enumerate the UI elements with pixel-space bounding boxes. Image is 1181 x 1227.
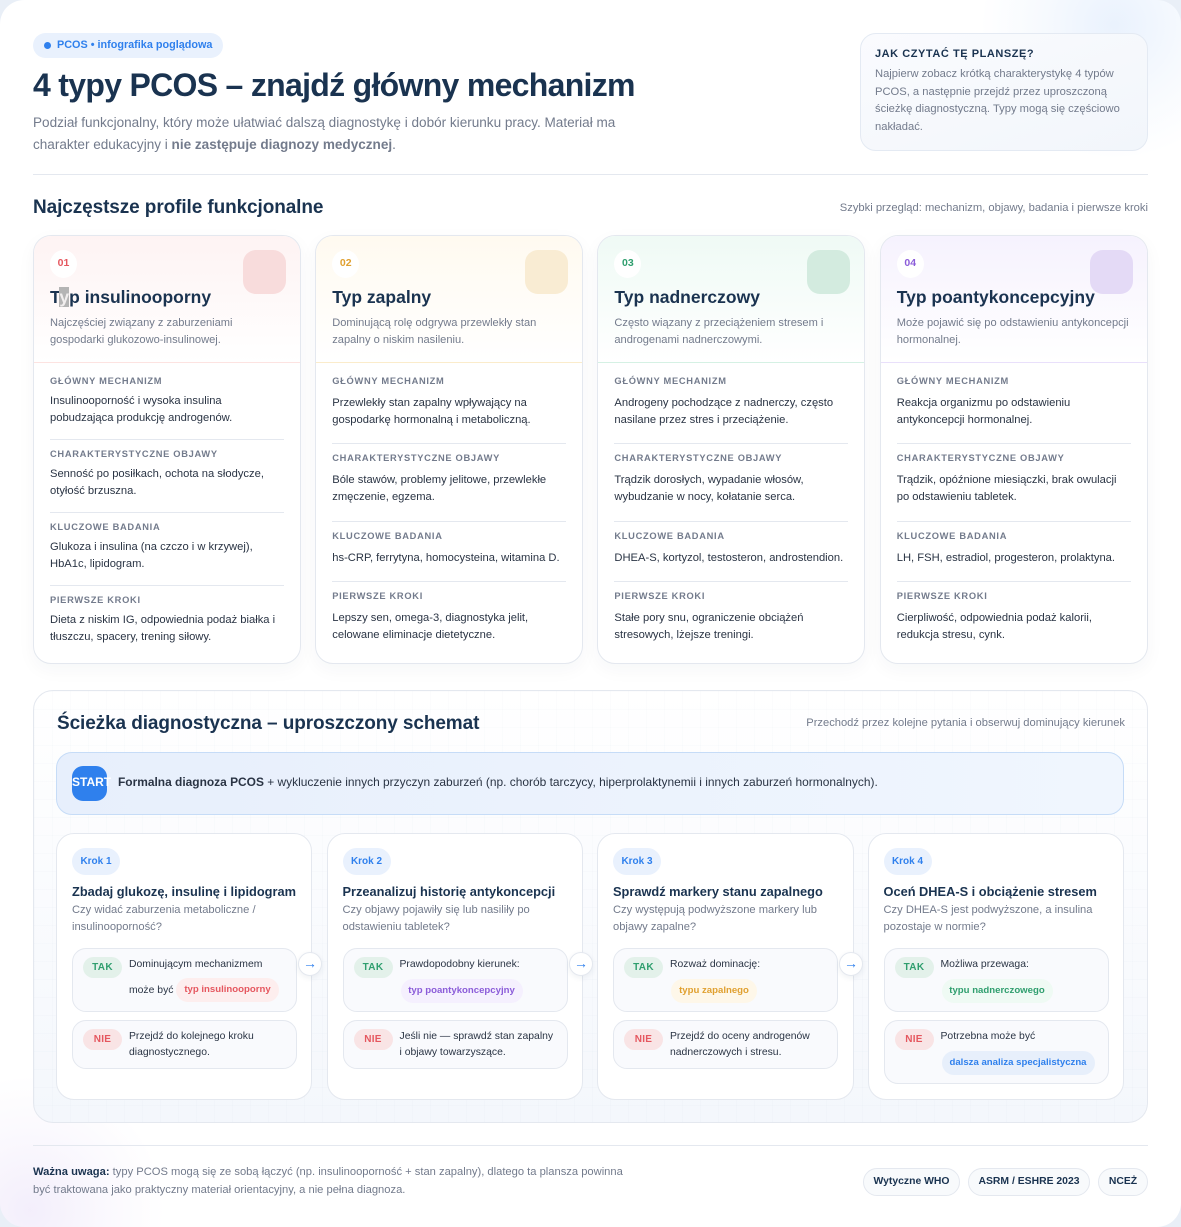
card description bbox=[332, 317, 536, 346]
step 3 bbox=[597, 833, 854, 1100]
step label: Krok 3 bbox=[621, 856, 653, 867]
panel: type 4: Cierpliwość, odpowiednia podaż kalorii, bbox=[897, 612, 1092, 624]
panel: type 2: Bóle stawów, problemy jelitowe, przewlekłe bbox=[332, 474, 546, 486]
how to read text: nakładać. bbox=[875, 121, 923, 133]
card description bbox=[50, 317, 232, 346]
how to read text: Najpierw zobacz krótką charakterystykę 4 typów bbox=[875, 68, 1114, 80]
step label bbox=[72, 848, 120, 875]
step question: Czy objawy pojawiły się lub nasiliły po bbox=[342, 904, 530, 916]
panel: type 3: nasilane przez stres i przeciążenie. bbox=[614, 414, 789, 426]
yes branch bbox=[884, 948, 1108, 1012]
number 01 bbox=[50, 250, 77, 278]
step question: Czy występują podwyższone markery lub bbox=[613, 904, 817, 916]
yes branch: typu nadnerczowego bbox=[949, 985, 1045, 996]
symptoms: CHARAKTERYSTYCZNE OBJAWY bbox=[332, 453, 500, 463]
tests: KLUCZOWE BADANIA bbox=[50, 522, 160, 532]
footer note bbox=[33, 1166, 623, 1196]
panel: type 3: DHEA-S, kortyzol, testosteron, androstendion. bbox=[614, 552, 843, 564]
symptoms: CHARAKTERYSTYCZNE OBJAWY bbox=[50, 449, 218, 459]
source: WHO bbox=[863, 1168, 960, 1196]
panel: type 4: antykoncepcji hormonalnej. bbox=[897, 414, 1032, 426]
no branch bbox=[613, 1020, 838, 1069]
step 1 bbox=[56, 833, 312, 1100]
panel: type 4: po odstawieniu tabletek. bbox=[897, 491, 1017, 503]
tests: KLUCZOWE BADANIA bbox=[332, 531, 443, 541]
number 02: 02 bbox=[340, 257, 352, 269]
yes branch: typ poantykoncepcyjny bbox=[408, 985, 515, 996]
how to read text: ścieżkę diagnostyczną. Typy mogą się częściowo bbox=[875, 103, 1120, 115]
yes branch: typ insulinooporny bbox=[184, 984, 271, 995]
step question: objawy zapalne? bbox=[613, 921, 696, 933]
panel: type 1: HbA1c, lipidogram. bbox=[50, 558, 145, 570]
panel: type 3: Trądzik dorosłych, wypadanie włosów, bbox=[614, 474, 804, 486]
yes branch: TAK bbox=[363, 962, 383, 973]
panel: type 2: gospodarkę hormonalną i metaboliczną. bbox=[332, 414, 531, 426]
first steps: PIERWSZE KROKI bbox=[50, 595, 141, 605]
start icon bbox=[72, 766, 107, 801]
panel: type 1 bbox=[33, 235, 301, 664]
step question: pozostaje w normie? bbox=[884, 921, 986, 933]
arrow: → bbox=[303, 955, 317, 971]
step title: Sprawdź markery stanu zapalnego bbox=[613, 884, 823, 899]
no branch: NIE bbox=[905, 1034, 923, 1045]
no branch bbox=[884, 1020, 1108, 1084]
arrow: → bbox=[574, 955, 588, 971]
no branch: Potrzebna może być bbox=[940, 1031, 1035, 1042]
no branch: dalsza analiza specjalistyczna bbox=[949, 1057, 1087, 1068]
no branch: Przejdź do oceny androgenów bbox=[670, 1031, 810, 1042]
card description: Może pojawić się po odstawieniu antykoncepcji bbox=[897, 317, 1129, 329]
panel: type 1: otyłość brzuszna. bbox=[50, 485, 136, 497]
how to read text: PCOS, a następnie przejdź przez uproszczoną bbox=[875, 86, 1107, 98]
card description: androgenami nadnerczowymi. bbox=[614, 334, 762, 346]
panel: how to read bbox=[860, 33, 1148, 151]
yes branch: Możliwa przewaga: bbox=[940, 959, 1029, 970]
panel: type 1: Dieta z niskim IG, odpowiednia podaż białka i bbox=[50, 614, 275, 626]
symptoms: CHARAKTERYSTYCZNE OBJAWY bbox=[614, 453, 782, 463]
yes branch: TAK bbox=[633, 962, 654, 973]
icon placeholder bbox=[525, 250, 568, 294]
panel: type 4: LH, FSH, estradiol, progesteron, prolaktyna. bbox=[897, 552, 1115, 564]
step label bbox=[613, 848, 661, 875]
step title: Przeanalizuj historię antykoncepcji bbox=[342, 884, 555, 899]
no branch: i objawy towarzyszące. bbox=[400, 1047, 506, 1058]
source: NCEZ: NCEŻ bbox=[1109, 1176, 1137, 1187]
start banner bbox=[56, 752, 1124, 815]
yes branch: Rozważ dominację: bbox=[670, 959, 760, 970]
no branch bbox=[342, 1020, 568, 1069]
no branch: NIE bbox=[364, 1034, 382, 1045]
source: WHO: Wytyczne WHO bbox=[873, 1176, 950, 1187]
arrow bbox=[839, 952, 863, 976]
yes branch: TAK bbox=[92, 962, 113, 973]
panel: type 2: Przewlekły stan zapalny wpływający na bbox=[332, 397, 527, 409]
icon placeholder bbox=[807, 250, 850, 294]
panel: type 1: Senność po posiłkach, ochota na słodycze, bbox=[50, 468, 264, 480]
path heading: Ścieżka diagnostyczna – uproszczony schemat bbox=[57, 713, 479, 734]
step question bbox=[72, 904, 256, 933]
no branch: Jeśli nie — sprawdź stan zapalny bbox=[400, 1031, 553, 1042]
panel: type 1: Insulinooporność i wysoka insulina bbox=[50, 395, 222, 407]
card description: zapalny o niskim nasileniu. bbox=[332, 334, 464, 346]
footer note: Ważna uwaga: typy PCOS mogą się ze sobą łączyć (np. insulinooporność + stan zapalny), dlatego ta plansza powinna bbox=[33, 1166, 623, 1178]
panel: type 2: hs-CRP, ferrytyna, homocysteina, witamina D. bbox=[332, 552, 560, 564]
step question bbox=[613, 904, 817, 933]
yes branch: TAK bbox=[904, 962, 924, 973]
step question bbox=[884, 904, 1092, 933]
step label bbox=[884, 848, 932, 875]
panel: type 2: celowane eliminacje dietetyczne. bbox=[332, 629, 495, 641]
panel: type 4: redukcja stresu, cynk. bbox=[897, 629, 1005, 641]
icon placeholder bbox=[243, 250, 286, 294]
number 03 bbox=[614, 250, 641, 278]
panel: type 4 bbox=[880, 235, 1148, 664]
step label bbox=[342, 848, 390, 875]
no branch bbox=[72, 1020, 297, 1069]
section note: Szybki przegląd: mechanizm, objawy, badania i pierwsze kroki bbox=[840, 202, 1148, 214]
number 04 bbox=[897, 250, 924, 278]
no branch: Przejdź do kolejnego kroku bbox=[129, 1031, 254, 1042]
panel: type 4: Reakcja organizmu po odstawieniu bbox=[897, 397, 1070, 409]
first steps: PIERWSZE KROKI bbox=[614, 591, 705, 601]
step title: Zbadaj glukozę, insulinę i lipidogram bbox=[72, 884, 296, 899]
title: 4 typy PCOS – znajdź główny mechanizm bbox=[33, 67, 635, 103]
no branch: nadnerczowych i stresu. bbox=[670, 1047, 781, 1058]
panel: diagnostic path bbox=[33, 690, 1148, 1123]
first steps: PIERWSZE KROKI bbox=[332, 591, 423, 601]
yes branch: może być bbox=[129, 985, 173, 996]
tests: KLUCZOWE BADANIA bbox=[614, 531, 725, 541]
card description: Często wiązany z przeciążeniem stresem i bbox=[614, 317, 823, 329]
panel: type 3: wybudzanie w nocy, kołatanie serca. bbox=[614, 491, 795, 503]
step question: odstawieniu tabletek? bbox=[342, 921, 450, 933]
panel: type 2 bbox=[315, 235, 583, 664]
number 04: 04 bbox=[904, 257, 916, 269]
source: ASRM bbox=[968, 1168, 1090, 1196]
number 02 bbox=[332, 250, 359, 278]
mechanism: GŁÓWNY MECHANIZM bbox=[332, 376, 445, 386]
panel: type 1: tłuszczu, spacery, trening siłowy. bbox=[50, 631, 211, 643]
badge: PCOS • infografika poglądowa bbox=[57, 39, 212, 51]
card description: Najczęściej związany z zaburzeniami bbox=[50, 317, 232, 329]
step label: Krok 1 bbox=[80, 856, 112, 867]
start icon: START bbox=[72, 775, 111, 789]
arrow bbox=[569, 952, 593, 976]
mechanism: GŁÓWNY MECHANIZM bbox=[614, 376, 727, 386]
step question: insulinooporność? bbox=[72, 921, 162, 933]
intro text: Podział funkcjonalny, który może ułatwiać dalszą diagnostykę i dobór kierunku pracy. Materiał ma bbox=[33, 115, 615, 130]
source: NCEZ bbox=[1098, 1168, 1148, 1196]
step question: Czy widać zaburzenia metaboliczne / bbox=[72, 904, 256, 916]
yes branch bbox=[72, 948, 297, 1012]
source: ASRM: ASRM / ESHRE 2023 bbox=[978, 1176, 1080, 1187]
number 03: 03 bbox=[622, 257, 634, 269]
card title: Typ insulinooporny bbox=[50, 287, 211, 307]
panel: type 3: stresowych, lżejsze treningi. bbox=[614, 629, 754, 641]
path note: Przechodź przez kolejne pytania i obserwuj dominujący kierunek bbox=[806, 717, 1125, 729]
intro text bbox=[33, 115, 616, 152]
step 2 bbox=[326, 833, 582, 1100]
how to read text bbox=[875, 68, 1120, 133]
card description bbox=[897, 317, 1129, 346]
panel: type 1: pobudzająca produkcję androgenów. bbox=[50, 412, 232, 424]
step question: Czy DHEA-S jest podwyższone, a insulina bbox=[884, 904, 1092, 916]
step question bbox=[342, 904, 530, 933]
number 01: 01 bbox=[58, 257, 69, 269]
yes branch: typu zapalnego bbox=[679, 985, 749, 996]
symptoms: CHARAKTERYSTYCZNE OBJAWY bbox=[897, 453, 1065, 463]
intro text: charakter edukacyjny i nie zastępuje diagnozy medycznej. bbox=[33, 137, 396, 152]
step title: Oceń DHEA-S i obciążenie stresem bbox=[884, 884, 1097, 899]
panel: type 3: Stałe pory snu, ograniczenie obciążeń bbox=[614, 612, 803, 624]
panel: type 4: Trądzik, opóźnione miesiączki, brak owulacji bbox=[897, 474, 1116, 486]
section heading: profiles: Najczęstsze profile funkcjonalne bbox=[33, 197, 323, 218]
yes branch: Dominującym mechanizmem bbox=[129, 959, 262, 970]
first steps: PIERWSZE KROKI bbox=[897, 591, 987, 601]
arrow: → bbox=[844, 955, 858, 971]
yes branch bbox=[613, 948, 838, 1012]
card description bbox=[614, 317, 823, 346]
icon placeholder bbox=[1090, 250, 1133, 294]
start text: Formalna diagnoza PCOS + wykluczenie innych przyczyn zaburzeń (np. chorób tarczycy, hiperprolaktynemii i innych zaburzeń hormonalnych). bbox=[118, 775, 878, 789]
footer note: być traktowana jako praktyczny materiał orientacyjny, a nie pełna diagnoza. bbox=[33, 1184, 405, 1196]
card title: Typ poantykoncepcyjny bbox=[897, 287, 1095, 307]
panel: type 3: Androgeny pochodzące z nadnerczy, często bbox=[614, 397, 833, 409]
no branch: NIE bbox=[94, 1034, 111, 1045]
no branch: NIE bbox=[635, 1034, 652, 1045]
card description: Dominującą rolę odgrywa przewlekły stan bbox=[332, 317, 536, 329]
no branch: diagnostycznego. bbox=[129, 1047, 210, 1058]
panel: type 3 bbox=[597, 235, 865, 664]
tests: KLUCZOWE BADANIA bbox=[897, 531, 1007, 541]
panel: type 1: Glukoza i insulina (na czczo i w krzywej), bbox=[50, 541, 253, 553]
arrow bbox=[298, 952, 322, 976]
card title: Typ zapalny bbox=[332, 287, 431, 307]
how to read heading: JAK CZYTAĆ TĘ PLANSZĘ? bbox=[875, 48, 1034, 60]
yes branch: Prawdopodobny kierunek: bbox=[400, 959, 520, 970]
card description: gospodarki glukozowo-insulinowej. bbox=[50, 334, 221, 346]
mechanism: GŁÓWNY MECHANIZM bbox=[897, 376, 1009, 386]
card description: hormonalnej. bbox=[897, 334, 961, 346]
yes branch bbox=[342, 948, 568, 1012]
card title: Typ nadnerczowy bbox=[614, 287, 760, 307]
badge bbox=[33, 33, 223, 58]
step label: Krok 2 bbox=[351, 856, 382, 867]
step label: Krok 4 bbox=[892, 856, 923, 867]
panel: type 2: Lepszy sen, omega-3, diagnostyka jelit, bbox=[332, 612, 528, 624]
mechanism: GŁÓWNY MECHANIZM bbox=[50, 376, 162, 386]
step 4 bbox=[868, 833, 1124, 1100]
panel: type 2: zmęczenie, egzema. bbox=[332, 491, 435, 503]
